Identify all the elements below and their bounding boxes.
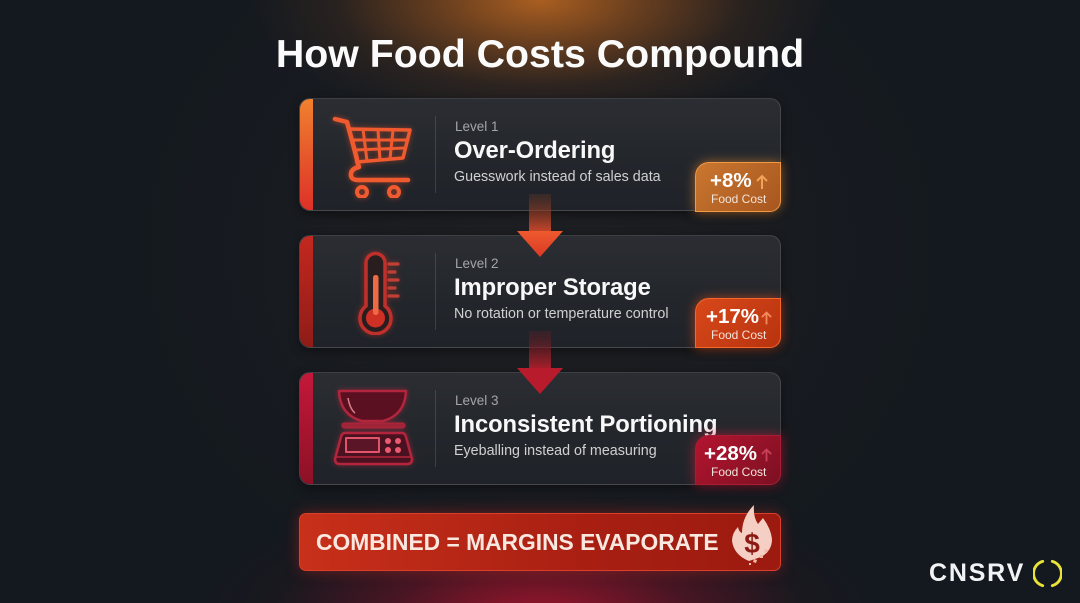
panel: level 2 improper storage: [299, 235, 781, 348]
icon: up arrow: [761, 448, 772, 462]
description: No rotation or temperature control: [454, 306, 669, 322]
description: Guesswork instead of sales data: [454, 169, 661, 185]
panel: level 3 inconsistent portioning: [299, 372, 781, 485]
level label: Level 1: [455, 119, 499, 134]
heading: Over-Ordering: [454, 137, 615, 164]
badge: +28% food cost: Food Cost: [711, 465, 766, 479]
badge: +28% food cost: [695, 435, 781, 485]
description: Eyeballing instead of measuring: [454, 443, 657, 459]
logo: CNSRV: [929, 559, 1062, 588]
panel: level 1 over-ordering: [299, 98, 781, 211]
badge: +17% food cost: Food Cost: [711, 328, 766, 342]
icon: flaming dollar: [732, 505, 772, 565]
level label: Level 3: [455, 393, 499, 408]
level label: Level 2: [455, 256, 499, 271]
icon: up arrow: [756, 174, 768, 189]
title: How Food Costs Compound: [276, 32, 804, 76]
icon: shopping cart: [330, 114, 415, 202]
banner text: COMBINED = MARGINS EVAPORATE: [316, 529, 719, 555]
badge: +8% food cost: Food Cost: [711, 192, 766, 206]
badge: +8% food cost: [695, 162, 781, 212]
logo mark: [1033, 560, 1062, 588]
badge: +17% food cost: [695, 298, 781, 348]
badge: +17% food cost: +17%: [706, 305, 759, 328]
banner: combined margins evaporate: [299, 513, 781, 571]
arrow: level 2 to 3: [517, 331, 563, 394]
icon: kitchen scale: [330, 386, 416, 468]
heading: Inconsistent Portioning: [454, 411, 717, 438]
badge: +28% food cost: +28%: [704, 442, 757, 465]
icon: flaming dollar: $: [744, 528, 760, 559]
icon: thermometer: [355, 248, 402, 338]
badge: +8% food cost: +8%: [710, 169, 752, 192]
heading: Improper Storage: [454, 274, 651, 301]
logo wordmark: CNSRV: [929, 559, 1025, 587]
icon: up arrow: [761, 311, 772, 324]
arrow: level 1 to 2: [517, 194, 563, 257]
